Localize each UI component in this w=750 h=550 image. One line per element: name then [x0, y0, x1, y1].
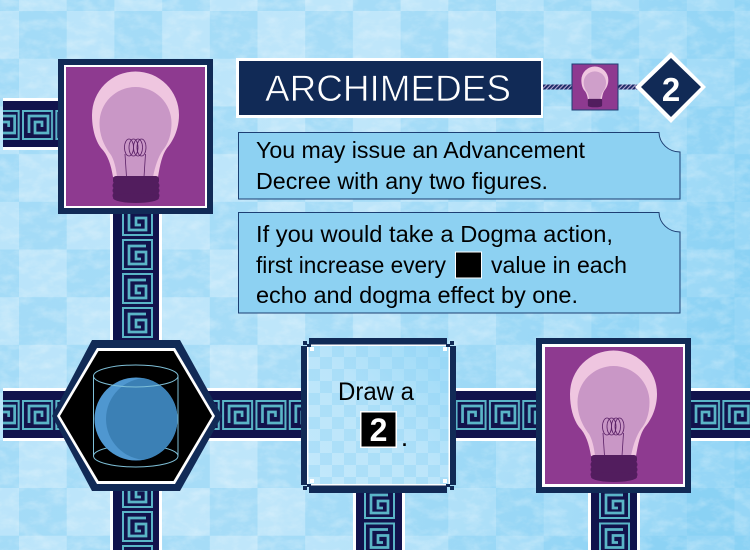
panel: first effect text box: Decree with any two figures.: [256, 168, 548, 194]
band: lower horizontal meander: [3, 388, 750, 441]
band: right vertical meander: [588, 488, 640, 550]
panel: second effect text box: first increase every: [256, 252, 446, 278]
connector: title to icon: [543, 84, 572, 90]
band: centre vertical meander: [353, 488, 405, 550]
connector: icon to diamond: [618, 84, 638, 90]
panel: first effect text box: [238, 132, 680, 199]
icon: light bulb: [570, 350, 657, 482]
band: top left meander: [3, 98, 63, 150]
icon: age 2 diamond: [635, 52, 706, 123]
panel: top light bulb card: [58, 59, 213, 214]
band: left vertical meander: [110, 209, 162, 550]
icon: black value square: [456, 252, 482, 278]
icon: light bulb: [92, 72, 179, 203]
panel: second effect text box: value in each: [491, 252, 627, 278]
icon: value 2 square: [360, 411, 397, 448]
heading: Archimedes title bar: ARCHIMEDES: [265, 67, 511, 109]
heading: Archimedes title bar: [236, 58, 543, 118]
panel: second effect text box: echo and dogma effect by one.: [256, 282, 578, 308]
panel: draw a 2 card: [301, 338, 456, 493]
icon: sphere and cylinder: [94, 365, 188, 467]
text: period: .: [402, 430, 407, 450]
icon: small light bulb: [572, 64, 618, 110]
panel: hexagon with sphere in cylinder: [52, 340, 222, 491]
panel: second effect text box: [238, 212, 680, 313]
icon: value 2 square: 2: [370, 412, 387, 448]
panel: first effect text box: You may issue an Advancement: [256, 137, 585, 163]
panel: lower right light bulb card: [536, 338, 691, 493]
text: draw a: Draw a: [338, 378, 414, 406]
icon: age 2 diamond: 2: [662, 71, 680, 108]
panel: second effect text box: If you would take a Dogma action,: [256, 221, 613, 247]
